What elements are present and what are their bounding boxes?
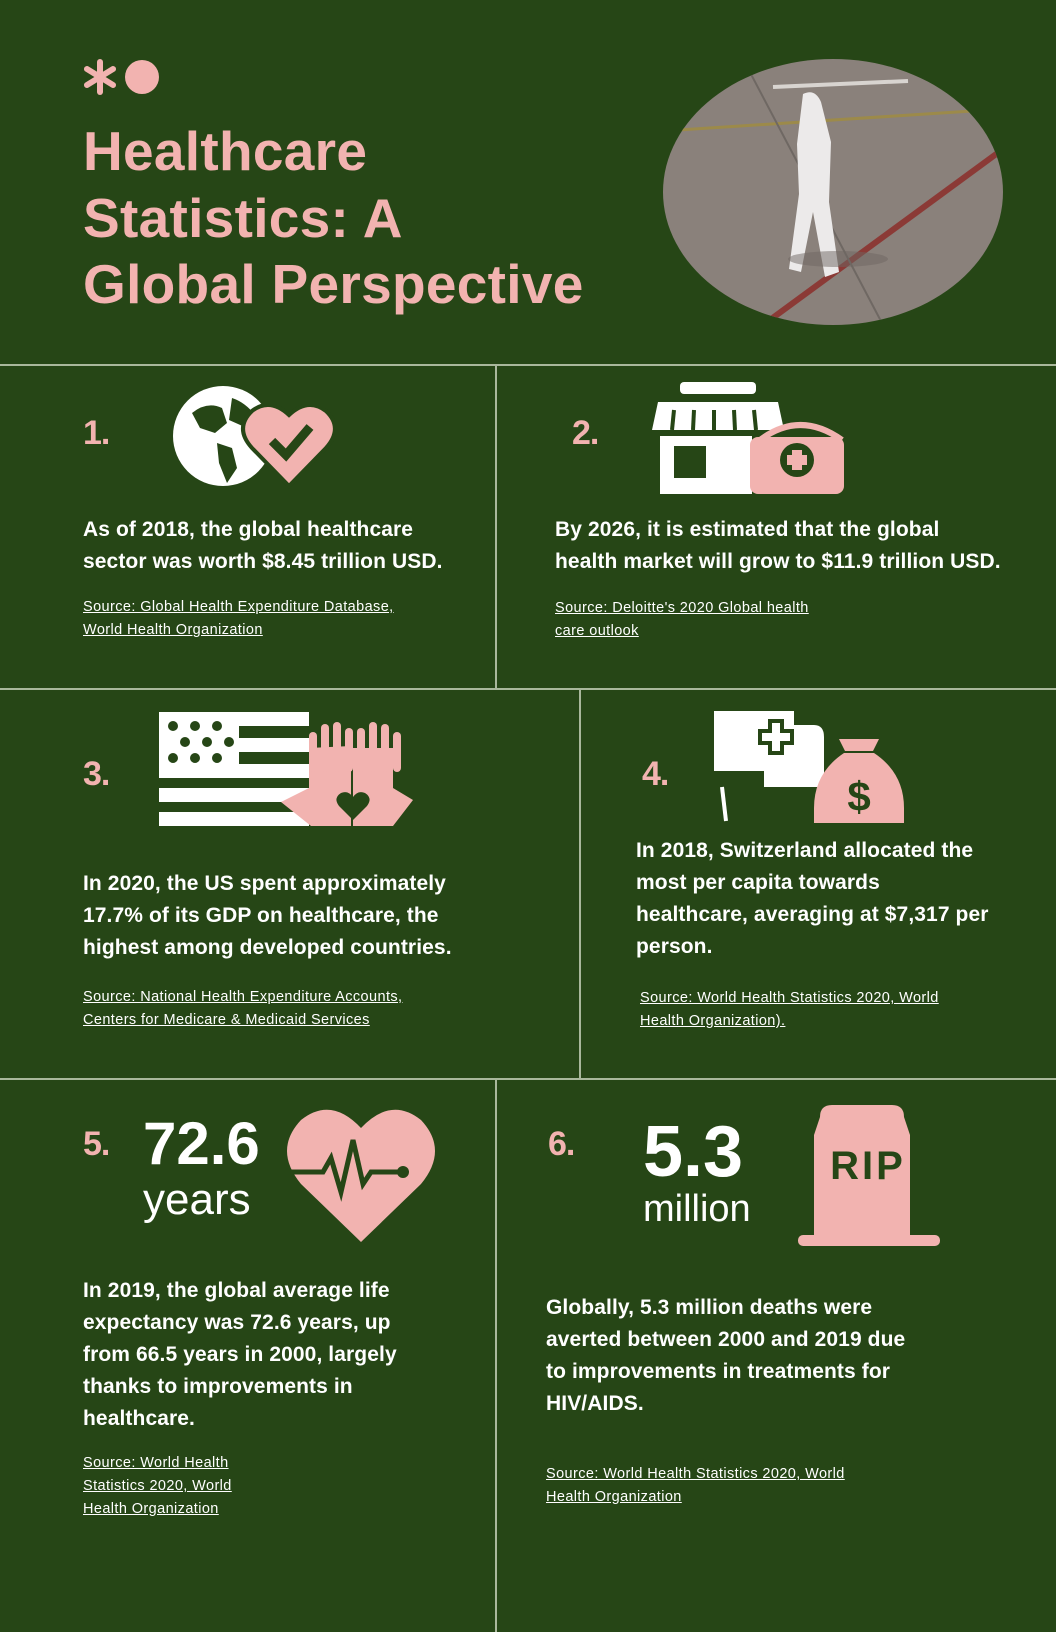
source: Source: Deloitte's 2020 Global health: [555, 600, 809, 616]
big stat 5.3 million: 5.3: [643, 1112, 743, 1192]
statement: [83, 872, 452, 959]
big stat 72.6 years: years: [143, 1175, 251, 1224]
statement: [636, 839, 989, 958]
statement: HIV/AIDS.: [546, 1392, 644, 1415]
source: Source: World Health: [83, 1455, 229, 1471]
statement: from 66.5 years in 2000, largely: [83, 1343, 397, 1366]
number 3: 3.: [83, 755, 109, 793]
big stat 5.3 million: [643, 1112, 751, 1230]
source: [546, 1466, 845, 1505]
panel 5: [83, 1110, 435, 1517]
statement: to improvements in treatments for: [546, 1360, 890, 1383]
icon: medical flag and money bag: [714, 711, 904, 823]
source: Source: World Health Statistics 2020, World: [546, 1466, 845, 1482]
number 5: 5.: [83, 1125, 109, 1163]
statement: healthcare, averaging at $7,317 per: [636, 903, 989, 926]
panel 2: [555, 382, 1001, 639]
title: Statistics: A: [83, 186, 403, 248]
panel 1: [83, 386, 443, 638]
source: [83, 1455, 232, 1517]
source: Centers for Medicare & Medicaid Services: [83, 1012, 370, 1028]
icon: heart with ECG: [287, 1110, 435, 1242]
statement: In 2019, the global average life: [83, 1279, 390, 1302]
icon: RIP tombstone: RIP: [830, 1144, 906, 1188]
source: [83, 599, 394, 638]
icon: medical flag and money bag: $: [847, 773, 871, 820]
source: Health Organization).: [640, 1013, 785, 1029]
source: [555, 600, 809, 639]
source: Statistics 2020, World: [83, 1478, 232, 1494]
statement: healthcare.: [83, 1407, 195, 1430]
number 6: 6.: [548, 1125, 574, 1163]
statement: 17.7% of its GDP on healthcare, the: [83, 904, 439, 927]
source: World Health Organization: [83, 622, 263, 638]
statement: sector was worth $8.45 trillion USD.: [83, 550, 443, 573]
source: [640, 990, 939, 1029]
big stat 72.6 years: [143, 1110, 260, 1224]
statement: [546, 1296, 905, 1415]
statement: [555, 518, 1001, 573]
photo: person in protective suit: [663, 59, 1003, 325]
panel 6: [546, 1105, 940, 1505]
statement: health market will grow to $11.9 trillion USD.: [555, 550, 1001, 573]
source: Source: World Health Statistics 2020, World: [640, 990, 939, 1006]
icon: US flag with hands: [159, 712, 413, 826]
big stat 5.3 million: million: [643, 1188, 751, 1230]
title: Global Perspective: [83, 253, 584, 315]
statement: highest among developed countries.: [83, 936, 452, 959]
source: [83, 989, 402, 1028]
source: Health Organization: [83, 1501, 219, 1517]
statement: person.: [636, 935, 713, 958]
title: [83, 120, 584, 315]
title: Healthcare: [83, 120, 367, 182]
source: Source: Global Health Expenditure Database,: [83, 599, 394, 615]
statement: thanks to improvements in: [83, 1375, 353, 1398]
statement: In 2020, the US spent approximately: [83, 872, 446, 895]
number 1: 1.: [83, 414, 109, 452]
statement: By 2026, it is estimated that the global: [555, 518, 939, 541]
statement: As of 2018, the global healthcare: [83, 518, 413, 541]
statement: [83, 518, 443, 573]
icon: RIP tombstone: [798, 1105, 940, 1246]
dividers: [0, 364, 1056, 366]
big stat 72.6 years: 72.6: [143, 1110, 260, 1177]
statement: most per capita towards: [636, 871, 880, 894]
source: care outlook: [555, 623, 639, 639]
number 4: 4.: [642, 755, 668, 793]
statement: In 2018, Switzerland allocated the: [636, 839, 973, 862]
panel 3: [83, 712, 452, 1028]
statement: Globally, 5.3 million deaths were: [546, 1296, 872, 1319]
statement: averted between 2000 and 2019 due: [546, 1328, 905, 1351]
panel 4: [636, 711, 989, 1029]
icon: globe with heart: [173, 386, 333, 486]
source: Source: National Health Expenditure Accounts,: [83, 989, 402, 1005]
logo: [84, 59, 159, 95]
statement: expectancy was 72.6 years, up: [83, 1311, 391, 1334]
source: Health Organization: [546, 1489, 682, 1505]
statement: [83, 1279, 397, 1430]
icon: shop and medical kit: [652, 382, 844, 494]
number 2: 2.: [572, 414, 598, 452]
